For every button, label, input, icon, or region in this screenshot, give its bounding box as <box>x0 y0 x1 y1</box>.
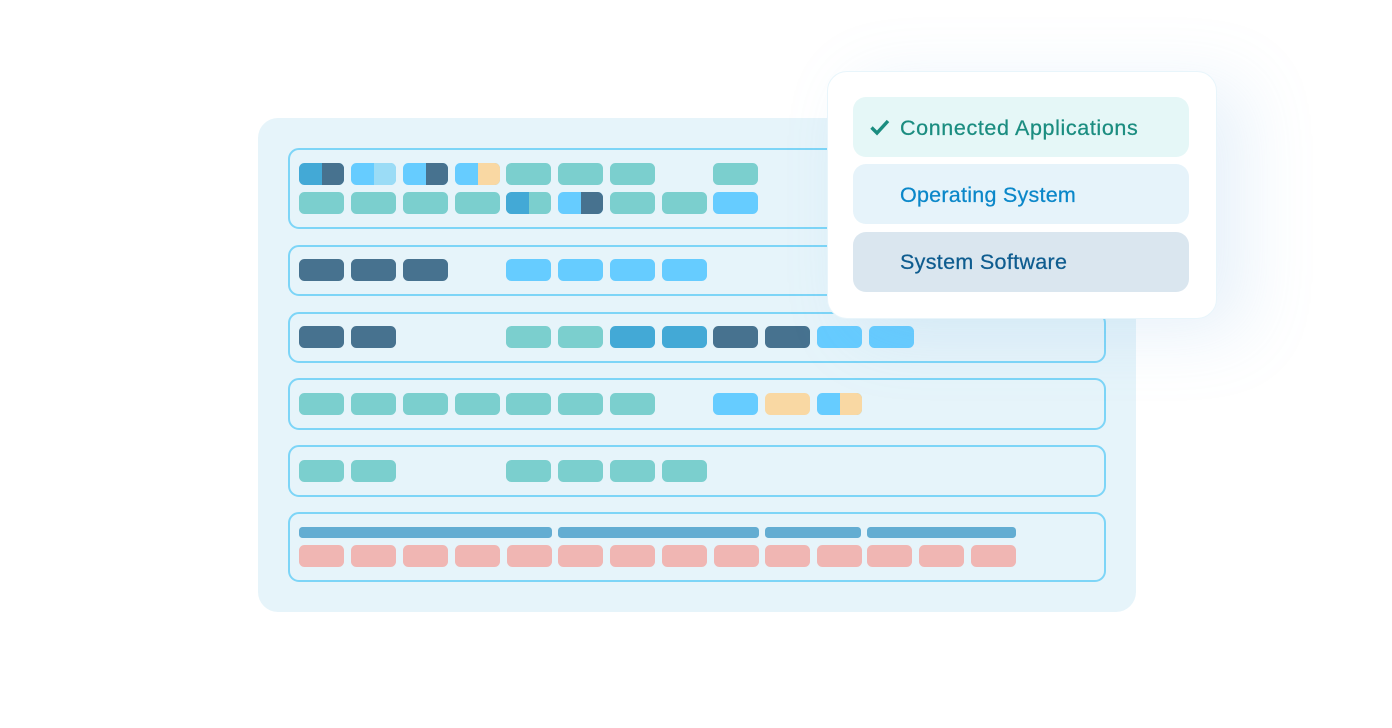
chip: mid blue <box>662 326 707 348</box>
row 6 bars and chips <box>299 527 1016 567</box>
chip: sky and pale blue <box>351 162 396 184</box>
chip: teal <box>351 192 396 214</box>
row 2 chips <box>299 259 707 281</box>
icon: check mark <box>870 120 890 136</box>
chip: teal <box>299 393 344 415</box>
row 6 frame <box>288 512 1106 582</box>
chip: teal <box>610 162 655 184</box>
row 3 chips <box>299 326 914 348</box>
legend item: Connected Applications <box>853 97 1189 157</box>
chip: pink <box>403 545 448 567</box>
label: System Software: System Software <box>900 250 1067 274</box>
chip: sky <box>817 326 862 348</box>
chip: navy <box>299 259 344 281</box>
panel: application stack board <box>258 118 1136 612</box>
chip: navy <box>351 259 396 281</box>
chip: teal <box>506 393 551 415</box>
chip: pink <box>919 545 964 567</box>
chip: pink <box>817 545 862 567</box>
chip: teal <box>662 192 707 214</box>
chip: teal <box>558 162 603 184</box>
chip: sky <box>713 192 758 214</box>
chip: pink <box>610 545 655 567</box>
chip: mid blue and teal <box>506 192 551 214</box>
chip: teal <box>610 393 655 415</box>
legend item: System Software <box>853 232 1189 292</box>
chip: teal <box>403 192 448 214</box>
chip: teal <box>506 162 551 184</box>
chip: teal <box>610 192 655 214</box>
chip: pink <box>765 545 810 567</box>
chip: teal <box>455 192 500 214</box>
chip: teal <box>455 393 500 415</box>
row 1 chips <box>299 163 758 214</box>
chip: navy <box>351 326 396 348</box>
chip: pink <box>971 545 1016 567</box>
row 1: connected application frame <box>288 148 1106 229</box>
chip: teal <box>506 326 551 348</box>
chip: navy <box>765 326 810 348</box>
chip: teal <box>558 393 603 415</box>
chip: pink <box>867 545 912 567</box>
chip: orange <box>765 393 810 415</box>
chip: sky <box>610 259 655 281</box>
chip: sky <box>558 259 603 281</box>
chip: sky and orange <box>455 162 500 184</box>
chip: sky <box>869 326 914 348</box>
row 5 chips <box>299 460 707 482</box>
chip: navy <box>713 326 758 348</box>
chip: pink <box>351 545 396 567</box>
row 3 frame <box>288 312 1106 363</box>
chip: sky and orange <box>817 393 862 415</box>
label: Operating System: Operating System <box>900 183 1076 207</box>
chip: teal <box>610 460 655 482</box>
chip: teal <box>299 460 344 482</box>
chip: teal <box>662 460 707 482</box>
legend item: Operating System <box>853 164 1189 224</box>
row 5 frame <box>288 445 1106 497</box>
chip: teal <box>403 393 448 415</box>
chip: teal <box>506 460 551 482</box>
chip: pink <box>714 545 759 567</box>
chip: teal <box>558 460 603 482</box>
panel: layer legend card <box>827 71 1217 319</box>
chip: pink <box>299 545 344 567</box>
chip: sky <box>713 393 758 415</box>
chip: pink <box>662 545 707 567</box>
chip: teal <box>713 162 758 184</box>
row 2 frame <box>288 245 1106 296</box>
bar: span 1 <box>299 527 552 538</box>
bar: span 2 <box>558 527 759 538</box>
bar: span 3 <box>765 527 861 538</box>
chip: pink <box>558 545 603 567</box>
chip: mid blue <box>610 326 655 348</box>
chip: mid blue and navy <box>299 162 344 184</box>
chip: sky <box>662 259 707 281</box>
row 4 chips <box>299 393 862 415</box>
chip: teal <box>351 393 396 415</box>
chip: teal <box>299 192 344 214</box>
chip: pink <box>507 545 552 567</box>
chip: sky and navy <box>403 162 448 184</box>
chip: teal <box>351 460 396 482</box>
chip: sky and navy <box>558 192 603 214</box>
label: Connected Applications: Connected Applications <box>900 116 1138 140</box>
chip: teal <box>558 326 603 348</box>
bar: span 4 <box>867 527 1016 538</box>
chip: navy <box>299 326 344 348</box>
chip: pink <box>455 545 500 567</box>
row 4 frame <box>288 378 1106 430</box>
chip: navy <box>403 259 448 281</box>
chip: sky <box>506 259 551 281</box>
